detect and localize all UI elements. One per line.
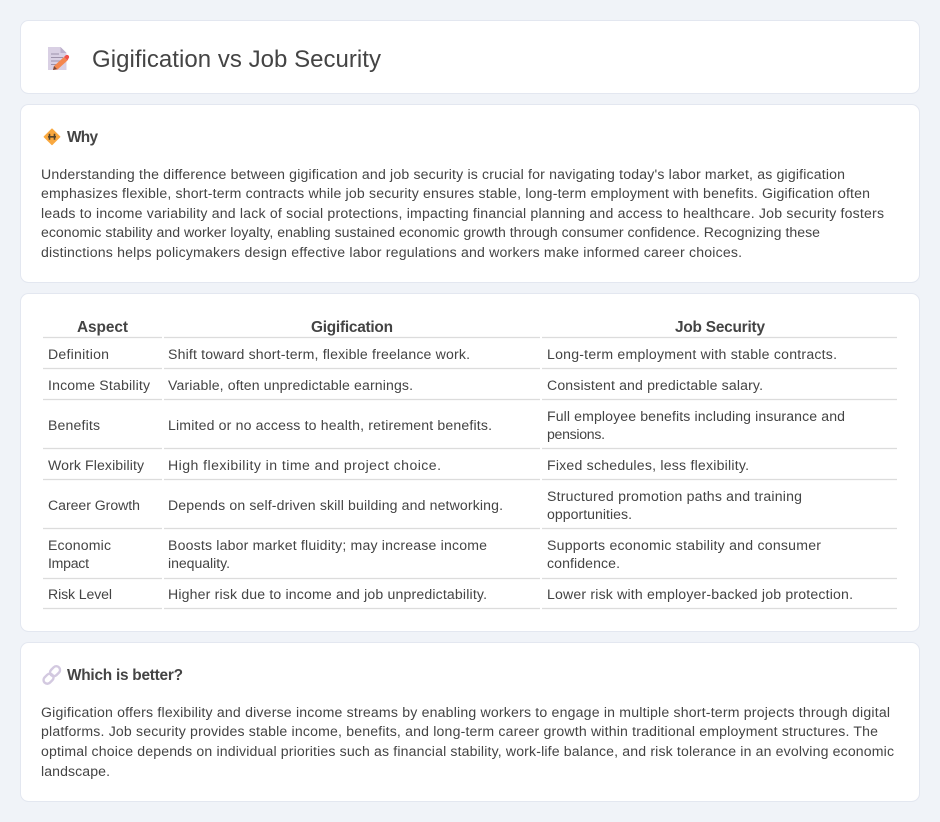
row: economic impact: Impact xyxy=(48,555,89,571)
text block: why paragraph: emphasizes flexible, short-term contracts while job security ensures stable, long-term employment with benefits. Gigification often xyxy=(41,185,870,201)
row: income stability xyxy=(48,377,763,393)
row: economic impact: Boosts labor market fluidity; may increase income xyxy=(168,537,487,553)
table header: Gigification xyxy=(311,319,393,336)
table header: Job Security xyxy=(675,319,765,336)
row: definition xyxy=(48,346,837,362)
row: benefits: Limited or no access to health, retirement benefits. xyxy=(168,417,492,433)
row: risk level xyxy=(48,586,853,602)
row: economic impact: inequality. xyxy=(168,555,230,571)
icon: warning diamond xyxy=(44,129,60,145)
row: definition: Definition xyxy=(48,346,109,362)
text block: which is better paragraph: optimal choice depends on individual priorities such as financial stability, work-life balance, and risk tolerance in an evolving economic xyxy=(41,743,894,759)
panel: why xyxy=(20,104,920,282)
title: Gigification vs Job Security xyxy=(92,46,381,73)
row: economic impact: Supports economic stability and consumer xyxy=(547,537,821,553)
panel: comparison table xyxy=(20,294,920,632)
row: benefits: Benefits xyxy=(48,417,100,433)
icon: memo with pencil xyxy=(48,47,69,70)
text block: why paragraph: Understanding the difference between gigification and job security is crucial for navigating today's labor market, as gigification xyxy=(41,166,845,182)
row: career growth: Career Growth xyxy=(48,497,140,513)
text block: which is better paragraph: landscape. xyxy=(41,763,110,779)
row: work flexibility xyxy=(48,457,749,473)
table header: Aspect xyxy=(77,319,128,336)
icon: link xyxy=(42,665,62,685)
row: career growth xyxy=(48,488,802,522)
row: benefits xyxy=(48,408,845,442)
row: definition: Shift toward short-term, flexible freelance work. xyxy=(168,346,470,362)
text block: why paragraph: distinctions helps policymakers design effective labor regulations and workers make informed career choices. xyxy=(41,244,742,260)
text block: which is better paragraph: Gigification offers flexibility and diverse income streams by enabling workers to engage in multiple short-term projects through digital xyxy=(41,704,890,720)
row: economic impact: confidence. xyxy=(547,555,620,571)
text block: which is better paragraph: platforms. Job security provides stable income, benefits, and long-term career growth within traditional employment structures. The xyxy=(41,723,878,739)
heading: why: Why xyxy=(67,129,98,146)
row: work flexibility: Fixed schedules, less flexibility. xyxy=(547,457,749,473)
panel: which is better xyxy=(20,642,920,802)
heading: which is better: Which is better? xyxy=(67,667,183,684)
text block: why paragraph xyxy=(41,166,884,260)
row: benefits: Full employee benefits including insurance and xyxy=(547,408,845,424)
row: income stability: Income Stability xyxy=(48,377,151,393)
text block: why paragraph: leads to income variability and lack of social protections, impacting financial planning and access to healthcare. Job security fosters xyxy=(41,205,884,221)
row: income stability: Consistent and predictable salary. xyxy=(547,377,763,393)
row: work flexibility: High flexibility in time and project choice. xyxy=(168,457,441,473)
row: work flexibility: Work Flexibility xyxy=(48,457,145,473)
row: career growth: Depends on self-driven skill building and networking. xyxy=(168,497,503,513)
row: risk level: Risk Level xyxy=(48,586,112,602)
row: economic impact: Economic xyxy=(48,537,111,553)
row: benefits: pensions. xyxy=(547,426,605,442)
row: income stability: Variable, often unpredictable earnings. xyxy=(168,377,413,393)
row: definition: Long-term employment with stable contracts. xyxy=(547,346,837,362)
row: career growth: Structured promotion paths and training xyxy=(547,488,802,504)
text block: why paragraph: economic stability and worker loyalty, enabling sustained economic growth through consumer confidence. Recognizing these xyxy=(41,224,820,240)
row: risk level: Lower risk with employer-backed job protection. xyxy=(547,586,853,602)
row: risk level: Higher risk due to income and job unpredictability. xyxy=(168,586,487,602)
row: career growth: opportunities. xyxy=(547,506,632,522)
header panel xyxy=(20,20,920,94)
row: economic impact xyxy=(48,537,821,571)
table header xyxy=(77,319,765,336)
text block: which is better paragraph xyxy=(41,704,894,779)
